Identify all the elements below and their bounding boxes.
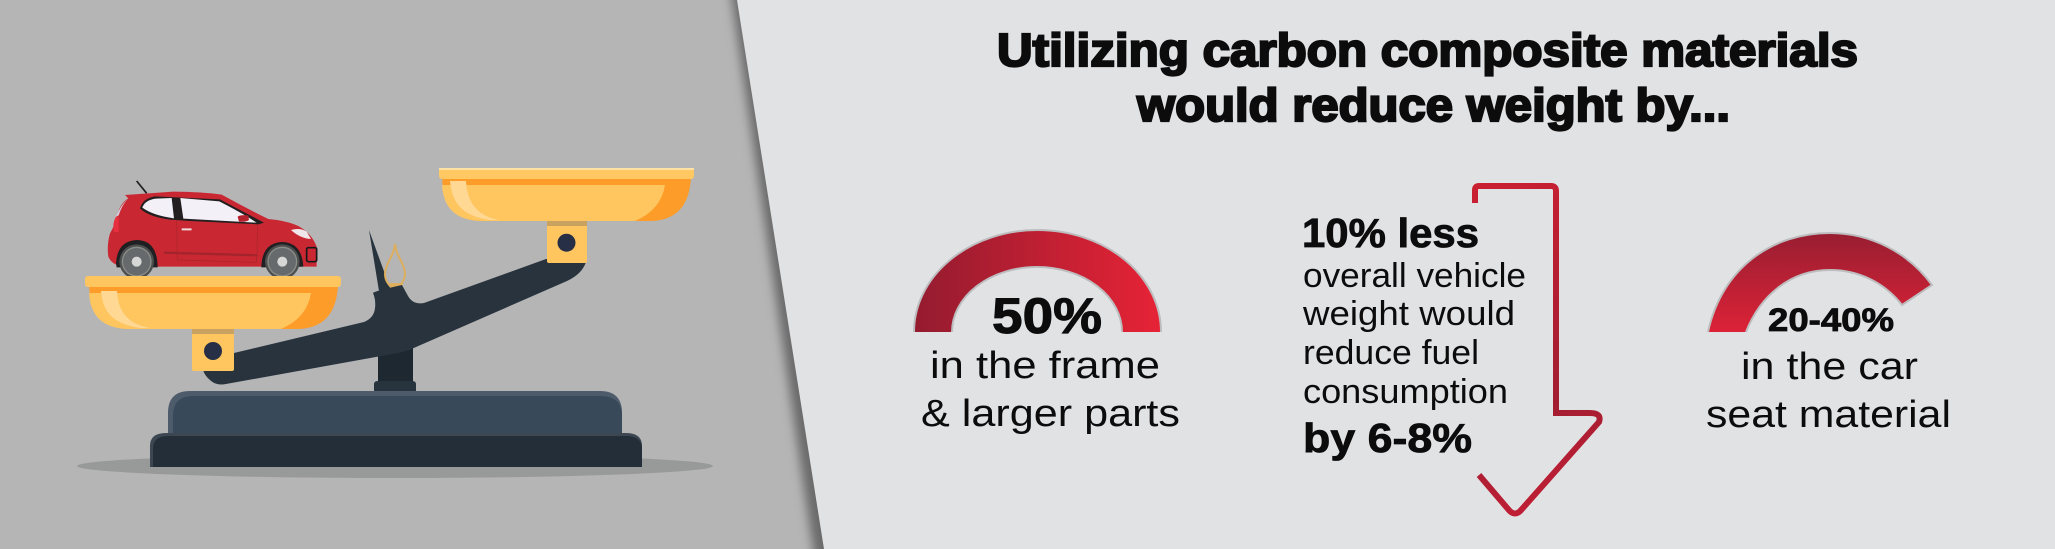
left bracket xyxy=(192,329,234,371)
window frame xyxy=(140,196,264,224)
car antenna xyxy=(137,181,147,193)
tail lamp xyxy=(113,217,119,232)
headlight xyxy=(291,229,311,239)
stat: 10% less text block: consumption xyxy=(1303,373,1508,411)
panel: scale background xyxy=(0,0,830,549)
front wheel xyxy=(261,242,303,279)
illustration: balance scale with car xyxy=(77,168,713,478)
value 20-40%: 20-40% xyxy=(1768,302,1894,338)
scale post xyxy=(374,345,416,391)
gauge arc 20-40% xyxy=(1708,233,1932,332)
label: car seat material: seat material xyxy=(1706,394,1951,436)
label: frame and larger parts: in the frame xyxy=(930,345,1160,387)
rear side window xyxy=(142,198,174,218)
rear wheel xyxy=(116,240,158,279)
right bracket xyxy=(547,221,587,263)
panel: statistics background xyxy=(737,0,2055,549)
title xyxy=(997,24,1858,131)
stat: 10% less text block: 10% less xyxy=(1302,210,1479,256)
stat: 10% less text block: weight would xyxy=(1302,295,1515,333)
title: Utilizing carbon composite materials xyxy=(997,24,1858,76)
door line and handle xyxy=(164,220,258,262)
right pan xyxy=(439,168,694,221)
arrow: downward outline xyxy=(1475,186,1600,514)
value 50%: 50% xyxy=(992,288,1102,344)
car on left pan xyxy=(108,181,317,279)
front side window xyxy=(180,198,257,223)
mirror xyxy=(238,215,249,222)
stat: 10% less text block: reduce fuel xyxy=(1303,334,1479,372)
panel edge shadow xyxy=(729,0,848,549)
front grille xyxy=(307,248,317,262)
stat: 10% less text block xyxy=(1302,210,1526,461)
car body xyxy=(108,192,317,267)
scale base xyxy=(150,391,642,467)
label: car seat material: in the car xyxy=(1741,346,1918,388)
stat: 20-40% gauge xyxy=(1706,233,1951,436)
gauge arc 50% xyxy=(914,230,1161,332)
stat: 10% less text block: by 6-8% xyxy=(1303,415,1472,461)
flame ornament xyxy=(385,244,405,289)
ground shadow xyxy=(77,454,713,478)
needle xyxy=(369,230,390,291)
tilted beam xyxy=(203,259,586,384)
label: frame and larger parts xyxy=(921,345,1180,435)
label: frame and larger parts: & larger parts xyxy=(921,393,1180,435)
label: car seat material xyxy=(1706,346,1951,436)
stat: 50% gauge xyxy=(914,230,1180,435)
rear window light xyxy=(116,198,128,217)
left pan xyxy=(85,276,341,329)
title: would reduce weight by... xyxy=(1136,79,1730,131)
stat: 10% less text block: overall vehicle xyxy=(1303,257,1526,295)
